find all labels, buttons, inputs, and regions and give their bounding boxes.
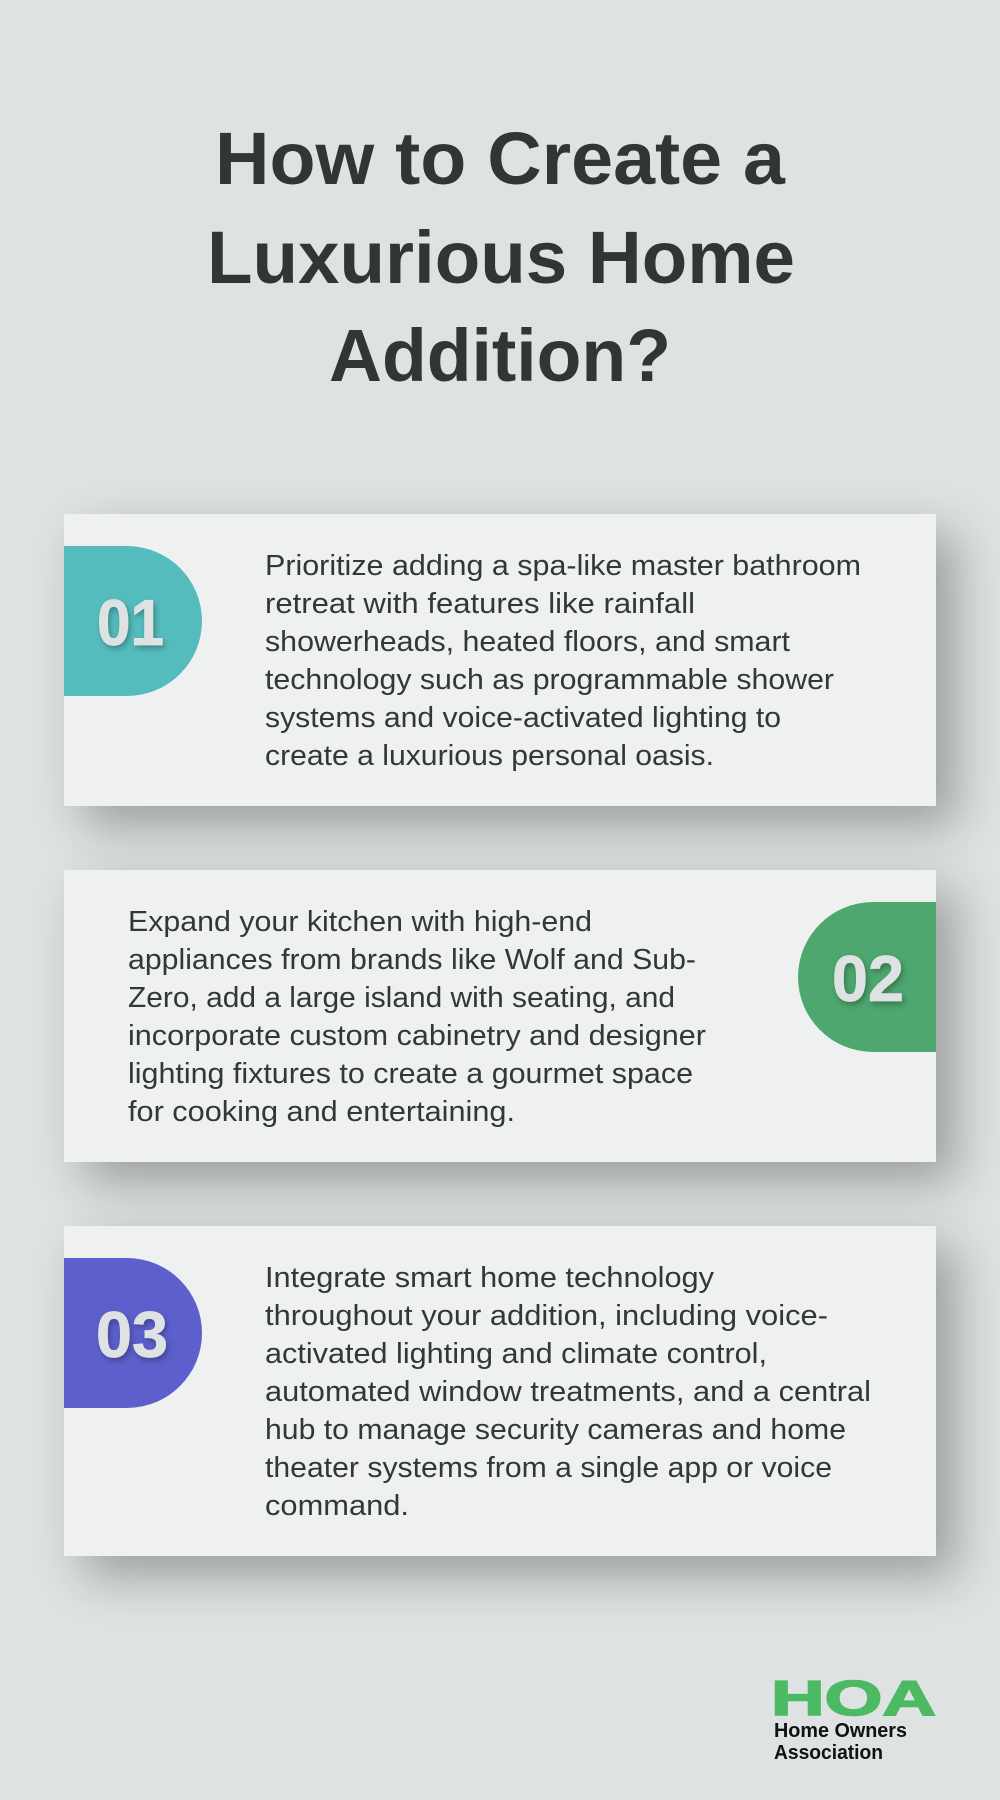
logo: HOA Home Owners Association: HOA (771, 1672, 936, 1726)
text block: step 03 description: command. (265, 1490, 409, 1522)
logo: HOA Home Owners Association: Home Owners (774, 1720, 907, 1742)
text block: step 02 description: Zero, add a large island with seating, and (128, 982, 675, 1014)
text block: step 01 description: Prioritize adding a spa-like master bathroom (265, 550, 861, 582)
text block: step 01 description: technology such as programmable shower (265, 664, 834, 696)
text block: step 02 description: incorporate custom cabinetry and designer (128, 1020, 706, 1052)
text block: step 03 description: hub to manage security cameras and home (265, 1414, 846, 1446)
badge: 03 (64, 1258, 202, 1408)
badge: 01 (64, 546, 202, 696)
text block: step 01 description: systems and voice-activated lighting to (265, 702, 781, 734)
logo: HOA Home Owners Association: Association (774, 1742, 883, 1764)
panel: step 03 (64, 1226, 936, 1556)
badge: 01: 01 (97, 586, 164, 659)
text block: step 01 description: retreat with features like rainfall (265, 588, 695, 620)
text block: step 01 description: showerheads, heated floors, and smart (265, 626, 790, 658)
text block: step 02 description: appliances from brands like Wolf and Sub- (128, 944, 696, 976)
text block: step 03 description: theater systems from a single app or voice (265, 1452, 832, 1484)
text block: step 03 description: automated window treatments, and a central (265, 1376, 871, 1408)
panel: step 02 (64, 870, 936, 1162)
badge: 02: 02 (832, 942, 904, 1015)
title (207, 117, 795, 397)
text block: step 02 description (128, 906, 706, 1128)
text block: step 01 description (265, 550, 861, 772)
text block: step 03 description: Integrate smart home technology (265, 1262, 715, 1294)
text block: step 02 description: Expand your kitchen with high-end (128, 906, 592, 938)
text block: step 03 description: throughout your addition, including voice- (265, 1300, 828, 1332)
text block: step 03 description (265, 1262, 871, 1522)
title: Luxurious Home (207, 216, 795, 299)
text block: step 02 description: lighting fixtures to create a gourmet space (128, 1058, 693, 1090)
logo: HOA Home Owners Association (771, 1672, 936, 1764)
text block: step 02 description: for cooking and entertaining. (128, 1096, 515, 1128)
title: Addition? (329, 314, 671, 397)
badge: 03: 03 (96, 1298, 168, 1371)
text block: step 01 description: create a luxurious personal oasis. (265, 740, 714, 772)
badge: 02 (798, 902, 936, 1052)
text block: step 03 description: activated lighting and climate control, (265, 1338, 767, 1370)
panel: step 01 (64, 514, 936, 806)
title: How to Create a (215, 117, 786, 200)
